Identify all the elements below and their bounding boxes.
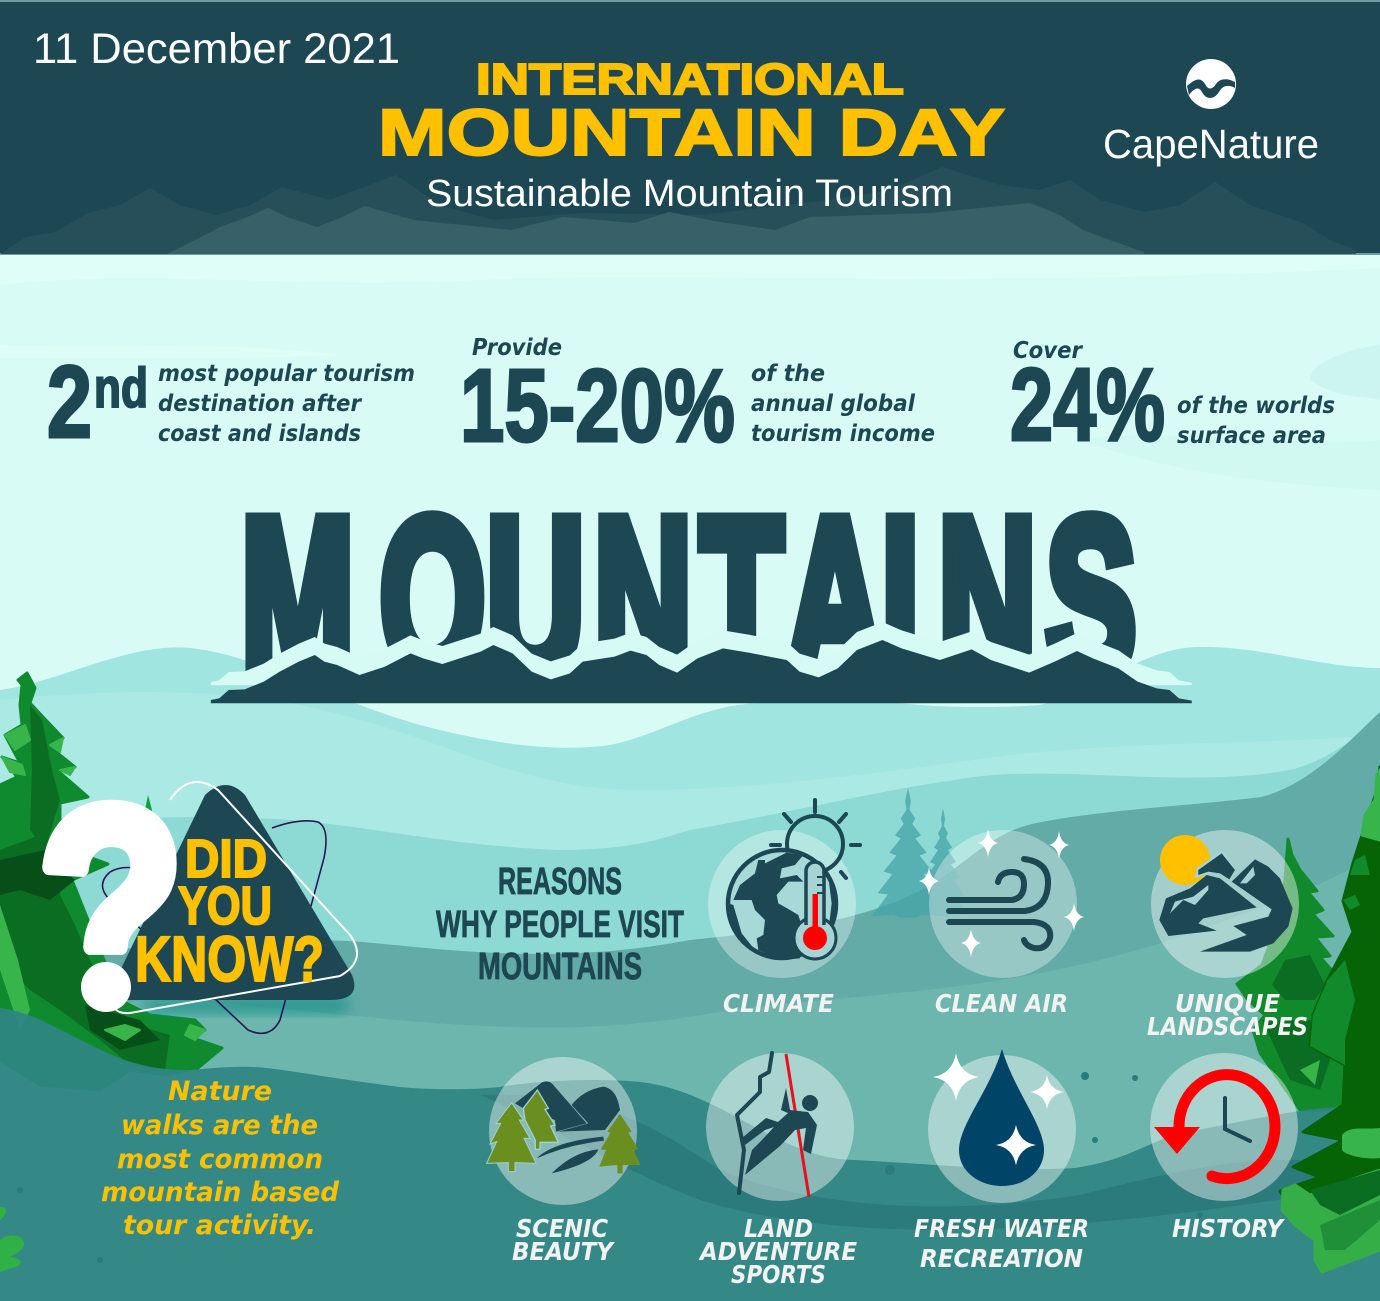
stat: 15-20%: [460, 335, 935, 463]
did you know text: DID: [185, 829, 267, 889]
logo: CapeNature: [1103, 59, 1319, 167]
did you know text: KNOW?: [135, 923, 324, 995]
reason: land adventure sports: [706, 1053, 854, 1201]
nature walks fact: tour activity.: [123, 1210, 316, 1241]
stat: 15-20%: of the: [751, 361, 825, 387]
label: clean air: CLEAN AIR: [935, 989, 1068, 1018]
nature walks fact: [101, 1076, 340, 1241]
reasons heading: REASONS: [498, 861, 622, 903]
icon: climber rope and wall: [737, 1053, 772, 1193]
did you know text: YOU: [178, 876, 272, 936]
stat: 2nd: coast and islands: [158, 421, 361, 447]
icon: clock hands: [1225, 1098, 1250, 1141]
dim distant trees: [872, 788, 968, 918]
icon: thermometer: [794, 862, 836, 959]
stat: 15-20%: 15-20%: [460, 348, 735, 463]
header front mountains: [167, 203, 1144, 254]
label: fresh water recreation: RECREATION: [920, 1244, 1083, 1273]
label: scenic beauty: BEAUTY: [512, 1237, 616, 1266]
purple outline triangle: [102, 821, 326, 1033]
stat: 15-20%: tourism income: [751, 421, 935, 447]
icon: globe: [728, 850, 837, 960]
nature walks fact: Nature: [168, 1076, 272, 1107]
icon: sun: [771, 800, 860, 878]
dark foreground lake: [0, 1008, 1380, 1301]
title: INTERNATIONAL: [476, 55, 904, 104]
icon: wind: [949, 859, 1050, 948]
left foreground tree: [0, 673, 222, 1090]
stat: 15-20%: annual global: [751, 391, 916, 417]
label: fresh water recreation: [914, 1214, 1089, 1273]
label: land adventure sports: LAND: [744, 1214, 813, 1243]
header band: [0, 0, 1380, 255]
label: history: HISTORY: [1172, 1214, 1286, 1243]
label: land adventure sports: ADVENTURE: [698, 1237, 857, 1266]
bottom left foliage: [0, 1207, 24, 1272]
ridge gap: [211, 622, 1192, 685]
stat: 24%: of the worlds: [1177, 393, 1335, 419]
dark triangle: [114, 785, 354, 1000]
icon: mountain and river: [1159, 850, 1293, 952]
label: unique landscapes: LANDSCAPES: [1147, 1012, 1308, 1041]
title: [378, 55, 1005, 169]
nature walks fact: most common: [117, 1144, 323, 1175]
nature walks fact: mountain based: [101, 1177, 340, 1208]
stat: 2nd: [47, 345, 415, 459]
background: soft clouds: [0, 255, 1380, 490]
stat: 24%: [1010, 338, 1335, 462]
middle right foreground tree: [1237, 839, 1345, 1110]
reasons heading: WHY PEOPLE VISIT: [436, 904, 684, 946]
date: 11 December 2021: [33, 25, 400, 73]
reason: unique landscapes: [1151, 830, 1299, 978]
badge shadow: [140, 1000, 350, 1012]
subtitle: Sustainable Mountain Tourism: [426, 173, 953, 215]
reasons heading: [436, 861, 684, 988]
white outline triangle: [111, 782, 357, 1013]
icon: water drop: [959, 1049, 1044, 1186]
background: rolling hills: [0, 647, 1380, 1301]
label: unique landscapes: [1147, 989, 1308, 1041]
reason: history: [1150, 1053, 1298, 1201]
stat: 2nd: destination after: [158, 391, 363, 417]
stat: 2nd: most popular tourism: [158, 361, 415, 387]
label: land adventure sports: SPORTS: [731, 1260, 826, 1289]
stat: 24%: surface area: [1177, 423, 1326, 449]
question mark: [42, 800, 177, 1012]
logo: CapeNature: CapeNature: [1103, 121, 1319, 167]
label: fresh water recreation: FRESH WATER: [914, 1214, 1089, 1243]
icon: red rope: [786, 1054, 809, 1197]
icon: red arrow: [1154, 1075, 1275, 1179]
stat: 2nd: nd: [94, 356, 148, 419]
tall right edge tree: [1280, 767, 1380, 1240]
header back mountains: [0, 167, 1356, 254]
big word: MOUNTAINS with ridge: MOUNTAINS: [241, 472, 1136, 725]
icon: sun disc: [1160, 835, 1210, 885]
reason: scenic beauty: [487, 1057, 641, 1205]
did you know badge: [42, 781, 358, 1034]
reason: fresh water recreation: [928, 1049, 1076, 1203]
icon: sparkles: [933, 1053, 1064, 1165]
ridge silhouette: [211, 640, 1192, 703]
icon: mountains and trees: [487, 1081, 641, 1173]
question mark: ?: [38, 749, 184, 1067]
icon: climber: [742, 1088, 818, 1175]
label: climate: CLIMATE: [723, 989, 834, 1018]
label: unique landscapes: UNIQUE: [1175, 989, 1280, 1018]
stat: 24%: 24%: [1010, 347, 1165, 462]
label: scenic beauty: SCENIC: [516, 1214, 609, 1243]
reason: clean air: [919, 829, 1084, 978]
did you know text: [135, 829, 324, 995]
title: MOUNTAIN DAY: [378, 95, 1005, 169]
nature walks fact: walks are the: [121, 1110, 318, 1141]
icon: sparkles: [919, 829, 1084, 957]
label: scenic beauty: [512, 1214, 616, 1266]
reason: climate: [708, 800, 860, 978]
stat: 15-20%: Provide: [472, 335, 562, 361]
reasons heading: MOUNTAINS: [478, 946, 642, 988]
stat: 2nd: 2: [47, 345, 92, 459]
stat: 24%: Cover: [1013, 338, 1084, 364]
label: land adventure sports: [698, 1214, 857, 1289]
bottom right foliage: [1282, 1170, 1380, 1272]
